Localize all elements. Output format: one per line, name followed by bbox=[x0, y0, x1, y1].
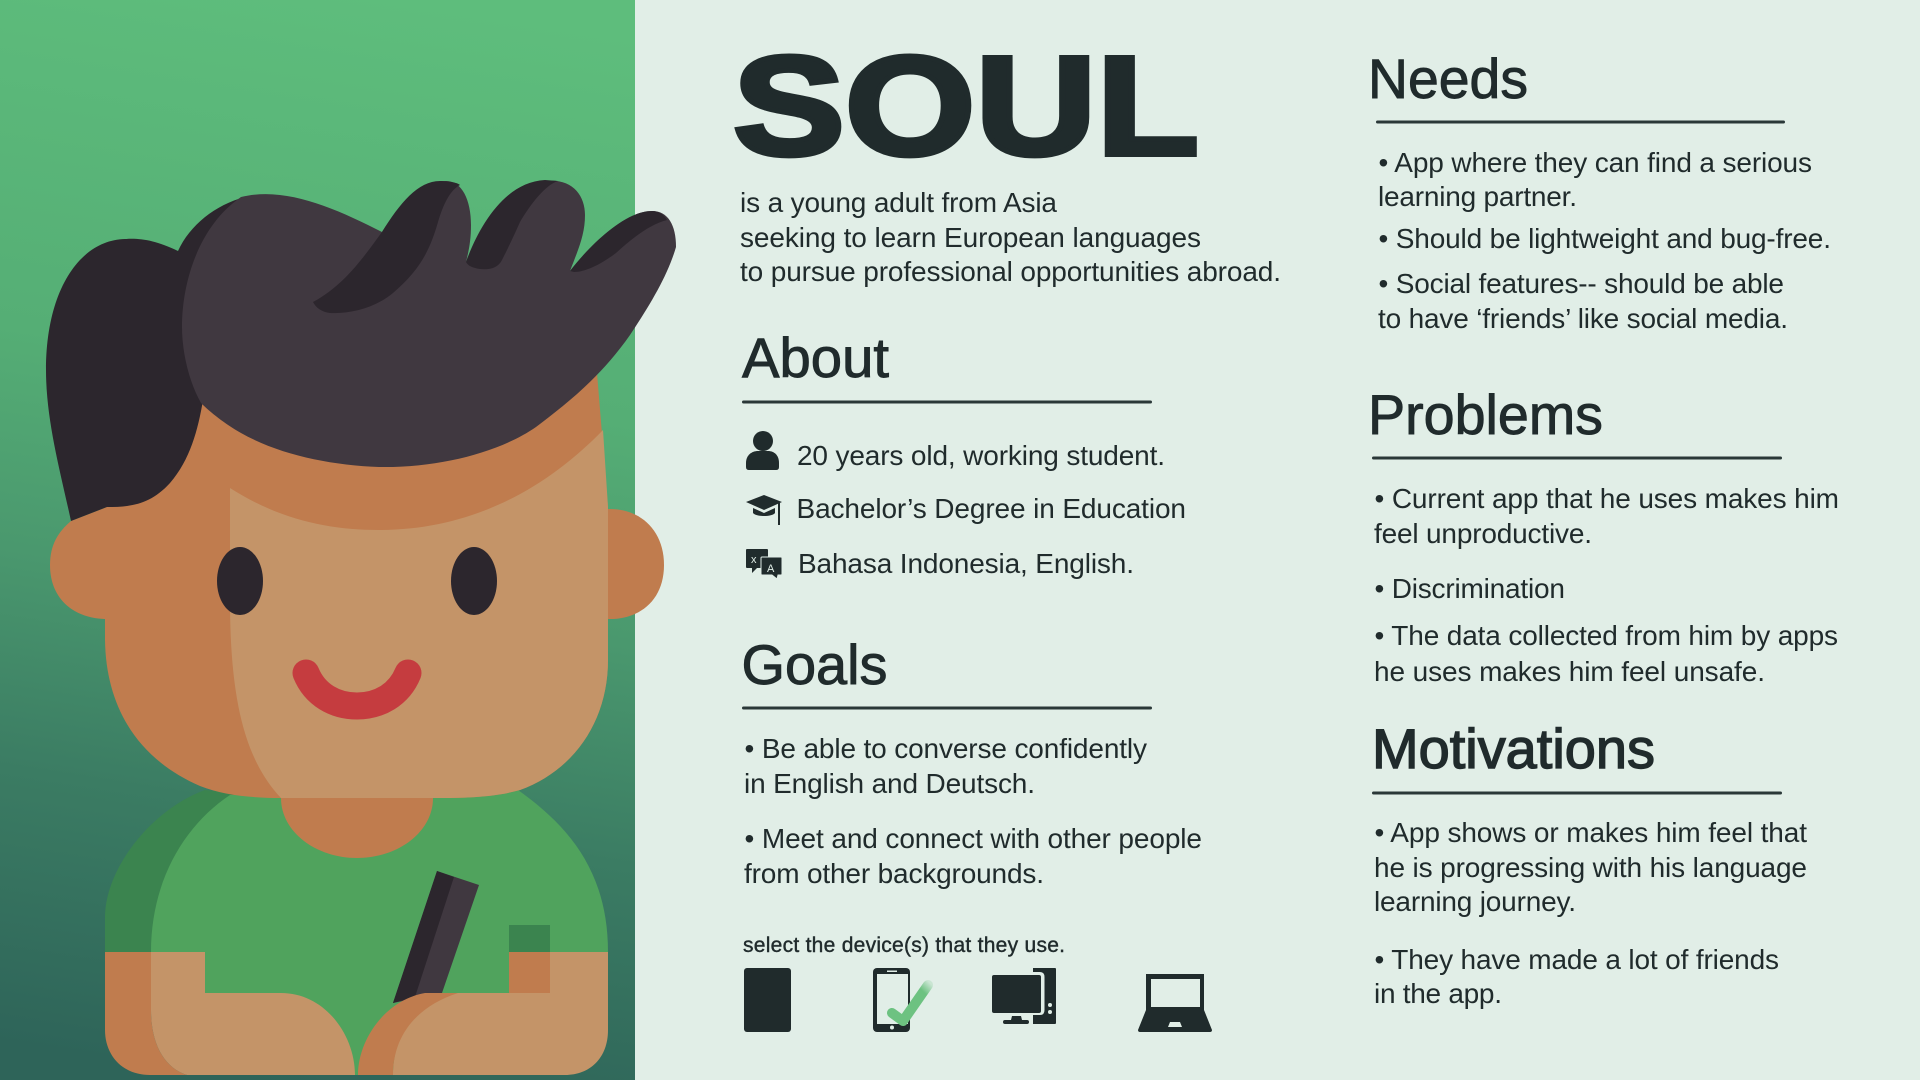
icon: laptop bbox=[1138, 974, 1212, 1032]
summary text: seeking to learn European languages bbox=[740, 222, 1201, 253]
summary text bbox=[740, 187, 1281, 287]
panel: needs bbox=[1368, 47, 1831, 334]
neck bbox=[281, 790, 433, 858]
panel: green background bbox=[0, 0, 635, 1080]
motivations list: learning journey. bbox=[1374, 886, 1576, 917]
needs list: • App where they can find a serious bbox=[1378, 147, 1812, 178]
device selector bbox=[743, 934, 1212, 1032]
icon: person bbox=[746, 431, 779, 470]
goals list: in English and Deutsch. bbox=[744, 768, 1035, 799]
illustration: character bbox=[46, 180, 676, 1075]
hair bbox=[46, 180, 676, 521]
caption: select the device(s) that they use. bbox=[743, 934, 1065, 957]
summary text: is a young adult from Asia bbox=[740, 187, 1057, 218]
needs list: • Social features-- should be able bbox=[1378, 268, 1784, 299]
goals list: • Be able to converse confidently bbox=[744, 733, 1147, 764]
ears bbox=[50, 507, 664, 619]
goals list bbox=[744, 733, 1202, 889]
goals list: from other backgrounds. bbox=[744, 858, 1044, 889]
problems list: feel unproductive. bbox=[1374, 518, 1592, 549]
icon: translate: A bbox=[767, 563, 775, 575]
eyes bbox=[217, 547, 497, 615]
needs list bbox=[1378, 147, 1831, 334]
problems list bbox=[1374, 483, 1839, 687]
panel: about bbox=[742, 326, 1186, 579]
left arm bbox=[105, 952, 355, 1075]
text: languages: Bahasa Indonesia, English. bbox=[798, 548, 1134, 579]
text: age: 20 years old, working student. bbox=[797, 440, 1165, 471]
face highlight bbox=[230, 430, 608, 798]
heading: problems: Problems bbox=[1368, 383, 1603, 446]
problems list: • Current app that he uses makes him bbox=[1374, 483, 1839, 514]
needs list: to have ‘friends’ like social media. bbox=[1378, 303, 1788, 334]
problems list: • The data collected from him by apps bbox=[1374, 620, 1838, 651]
needs list: • Should be lightweight and bug-free. bbox=[1378, 223, 1831, 254]
heading: needs: Needs bbox=[1368, 47, 1528, 110]
title: SOUL bbox=[733, 26, 1199, 184]
summary text: to pursue professional opportunities abroad. bbox=[740, 256, 1281, 287]
icon: tablet bbox=[744, 968, 791, 1032]
icon: translate bbox=[746, 549, 782, 579]
mouth bbox=[306, 673, 408, 706]
motivations list: he is progressing with his language bbox=[1374, 852, 1807, 883]
icon: graduation cap bbox=[746, 495, 782, 525]
shirt bbox=[105, 790, 608, 1075]
goals list: • Meet and connect with other people bbox=[744, 823, 1202, 854]
problems list: • Discrimination bbox=[1374, 573, 1565, 604]
heading: about: About bbox=[742, 326, 889, 389]
right arm bbox=[358, 952, 608, 1075]
head bbox=[105, 340, 608, 798]
needs list: learning partner. bbox=[1378, 181, 1577, 212]
icon: desktop computer bbox=[992, 968, 1056, 1024]
motivations list: in the app. bbox=[1374, 978, 1502, 1009]
heading: motivations: Motivations bbox=[1372, 717, 1655, 780]
heading: goals: Goals bbox=[742, 633, 888, 696]
pen bbox=[393, 871, 479, 1003]
icon: translate: x bbox=[751, 554, 757, 566]
motivations list: • App shows or makes him feel that bbox=[1374, 817, 1807, 848]
panel: problems bbox=[1368, 383, 1839, 687]
panel: motivations bbox=[1372, 717, 1807, 1009]
icon: phone with check bbox=[873, 968, 928, 1032]
problems list: he uses makes him feel unsafe. bbox=[1374, 656, 1765, 687]
panel: goals bbox=[742, 633, 1202, 889]
motivations list bbox=[1374, 817, 1807, 1009]
text: degree: Bachelor’s Degree in Education bbox=[796, 493, 1186, 524]
motivations list: • They have made a lot of friends bbox=[1374, 944, 1779, 975]
